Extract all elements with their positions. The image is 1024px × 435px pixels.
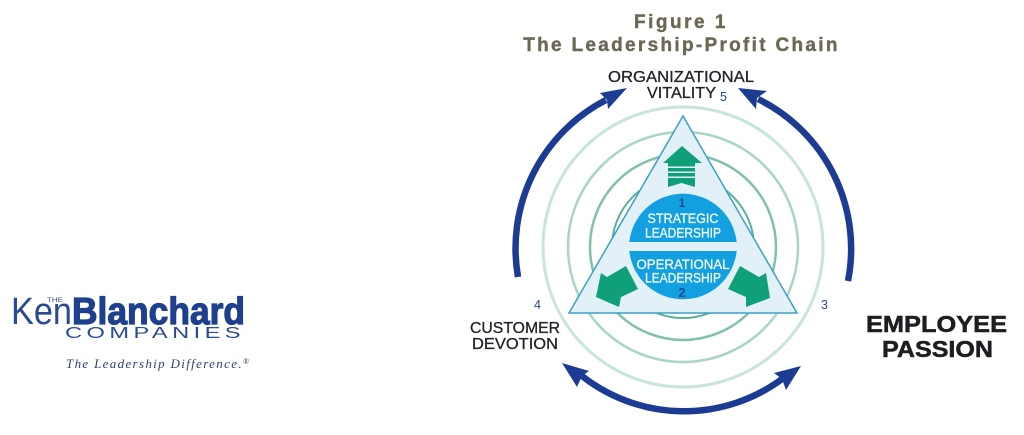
- label: employee passion: PASSION: [882, 336, 993, 362]
- concentric rings: [543, 107, 823, 387]
- operational leadership semicircle: [629, 251, 737, 300]
- strategic leadership semicircle: 1: [679, 196, 686, 210]
- icon: lower right arrow: [728, 266, 770, 307]
- title: The Leadership-Profit Chain: [523, 35, 840, 56]
- title: [523, 12, 840, 56]
- label: number 5: 5: [720, 90, 727, 104]
- triangle: [569, 116, 797, 313]
- logo: Ken Blanchard Companies: The Leadership Difference.: [66, 356, 242, 371]
- arrow: double-headed between customer devotion and employee passion: [562, 363, 801, 411]
- operational leadership semicircle: LEADERSHIP: [645, 270, 721, 286]
- logo: Ken Blanchard Companies: COMPANIES: [65, 325, 245, 342]
- label: organizational vitality: VITALITY: [647, 85, 716, 102]
- label: employee passion: [866, 311, 1007, 362]
- label: organizational vitality: ORGANIZATIONAL: [608, 69, 754, 86]
- label: customer devotion: DEVOTION: [472, 336, 558, 353]
- logo: Ken Blanchard Companies: [11, 291, 249, 371]
- logo: Ken Blanchard Companies: Blanchard: [72, 291, 245, 333]
- operational leadership semicircle: 2: [678, 285, 686, 300]
- arrow: employee passion to organizational vitality: [738, 88, 851, 281]
- arrow: customer devotion to organizational vitality: [516, 88, 627, 277]
- label: customer devotion: [470, 320, 560, 353]
- icon: lower left arrow: [596, 266, 638, 307]
- title: Figure 1: [634, 12, 728, 33]
- strategic leadership semicircle: STRATEGIC: [648, 210, 718, 226]
- icon: up arrow: [663, 146, 702, 187]
- strategic leadership semicircle: [629, 194, 737, 242]
- label: employee passion: EMPLOYEE: [866, 311, 1007, 337]
- label: number 3: 3: [821, 298, 828, 312]
- operational leadership semicircle: OPERATIONAL: [636, 256, 730, 272]
- label: customer devotion: CUSTOMER: [470, 320, 560, 337]
- label: organizational vitality: [608, 69, 754, 102]
- logo: Ken Blanchard Companies: ®: [243, 357, 249, 366]
- logo: Ken Blanchard Companies: THE: [47, 297, 64, 304]
- strategic leadership semicircle: LEADERSHIP: [645, 224, 721, 240]
- logo: Ken Blanchard Companies: Ken: [11, 291, 72, 333]
- label: number 4: 4: [534, 298, 541, 312]
